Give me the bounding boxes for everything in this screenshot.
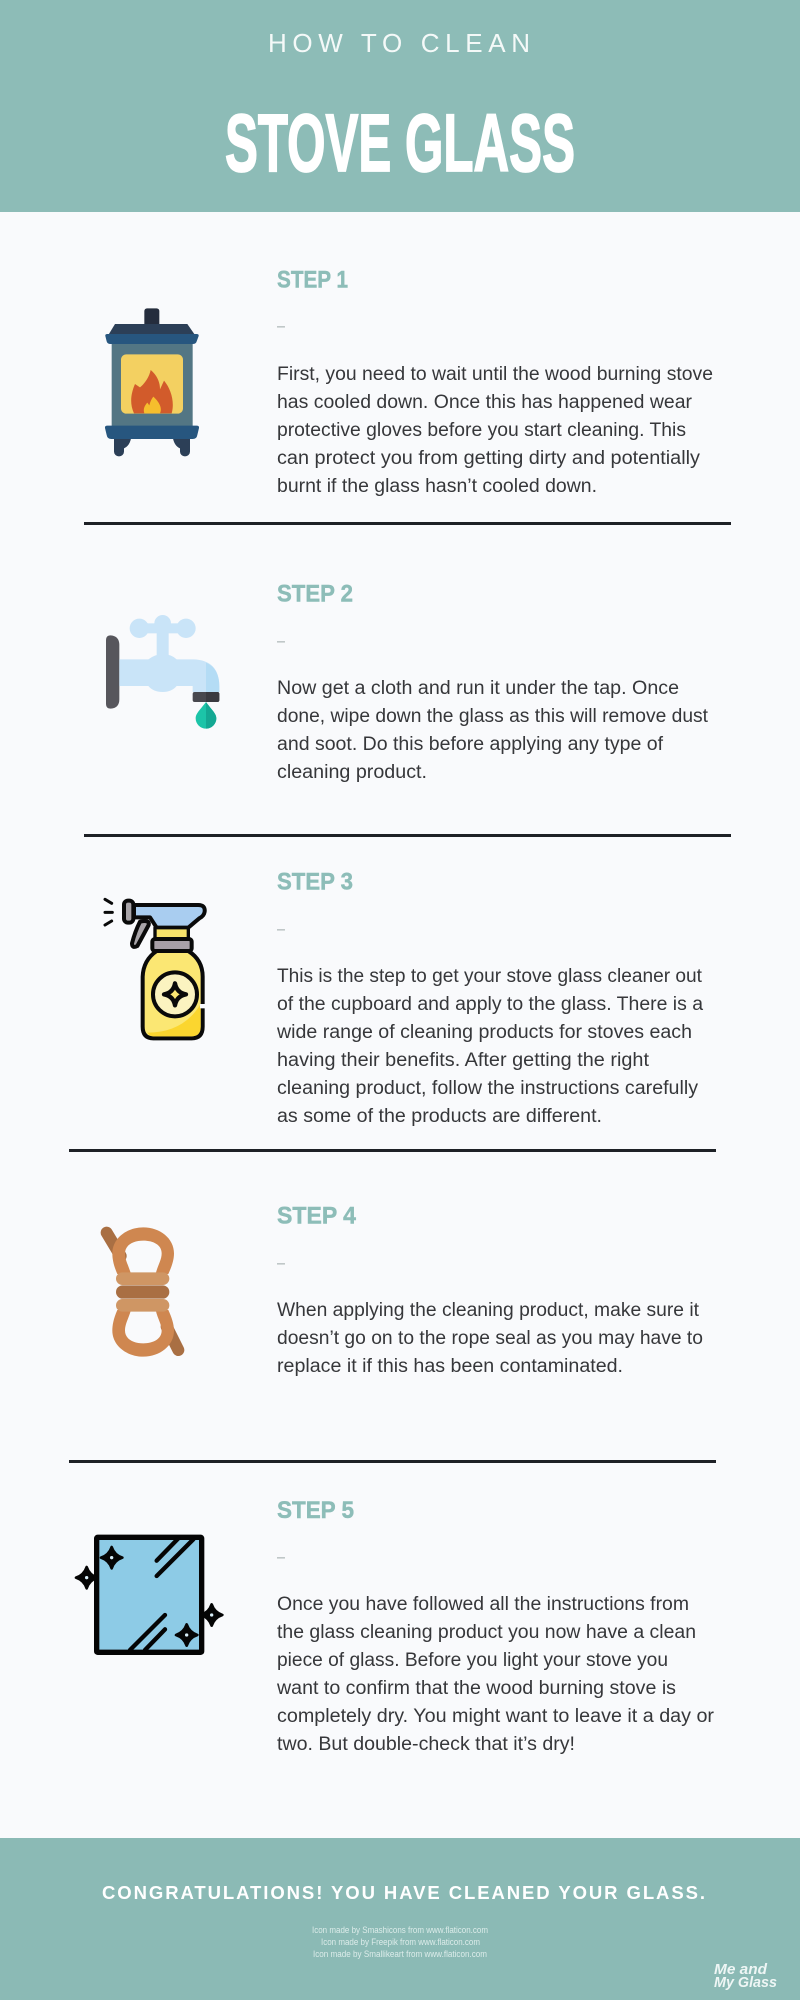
text block: step 5: Once you have followed all the instructions from	[277, 1594, 689, 1615]
text block: step 2: cleaning product.	[277, 762, 427, 783]
dash: –	[277, 1547, 285, 1568]
text block: step 3: This is the step to get your stove glass cleaner out	[277, 966, 703, 987]
icon: clean glass pane	[76, 1537, 222, 1652]
panel: footer	[0, 1838, 800, 2000]
panel: step 3	[105, 868, 703, 1127]
icon credits: Icon made by Smashicons from www.flaticon.com	[312, 1925, 488, 1935]
icon: spray bottle	[105, 899, 205, 1038]
icon credits: Icon made by Freepik from www.flaticon.com	[321, 1937, 480, 1947]
text block: step 3: wide range of cleaning products for stoves each	[276, 1022, 692, 1043]
text block: step 3: cleaning product, follow the instructions carefully	[277, 1078, 699, 1099]
text block: step 3	[276, 966, 703, 1127]
text block: step 1: has cooled down. Once this has happened wear	[277, 392, 693, 413]
logo: me and my glass: My Glass	[714, 1975, 777, 1991]
text block: step 4: replace it if this has been contaminated.	[277, 1356, 623, 1377]
text block: step 3: as some of the products are different.	[277, 1106, 602, 1127]
text block: step 5: two. But double-check that it’s dry!	[277, 1734, 575, 1755]
text block: step 5: the glass cleaning product you now have a clean	[277, 1622, 696, 1643]
title: stove glass: STOVE GLASS	[225, 98, 575, 189]
text block: step 3: having their benefits. After getting the right	[277, 1050, 650, 1071]
dash: –	[277, 316, 285, 337]
panel: step 1	[105, 266, 713, 497]
text block: step 4: When applying the cleaning product, make sure it	[277, 1300, 700, 1321]
panel: step 5	[76, 1497, 715, 1755]
icon: wood burning stove	[105, 308, 199, 456]
icon: rope	[107, 1227, 178, 1357]
dash: –	[277, 1253, 285, 1274]
logo: me and my glass: Me and	[714, 1962, 768, 1978]
icon credits: Icon made by Smallikeart from www.flaticon.com	[313, 1949, 487, 1959]
panel: header	[0, 0, 800, 212]
callout: congratulations: CONGRATULATIONS! YOU HAVE CLEANED YOUR GLASS.	[102, 1882, 705, 1903]
text block: step 2: Now get a cloth and run it under the tap. Once	[277, 678, 679, 699]
text block: step 4	[277, 1300, 703, 1377]
text block: step 1: protective gloves before you start cleaning. This	[277, 420, 686, 441]
dash: –	[277, 919, 285, 940]
text block: step 2: and soot. Do this before applying any type of	[277, 734, 664, 755]
text block: step 1: can protect you from getting dirty and potentially	[277, 448, 701, 469]
text block: step 5: want to confirm that the wood burning stove is	[276, 1678, 676, 1699]
heading: step 5: STEP 5	[277, 1497, 354, 1524]
text block: step 2: done, wipe down the glass as this will remove dust	[277, 706, 709, 727]
text block: step 3: of the cupboard and apply to the glass. There is a	[277, 994, 703, 1015]
text block: step 5	[276, 1594, 715, 1755]
dash: –	[277, 631, 285, 652]
icon: water tap	[106, 615, 219, 729]
icon credits	[312, 1925, 488, 1959]
heading: step 3: STEP 3	[277, 868, 353, 896]
title: how to clean: HOW TO CLEAN	[268, 28, 530, 58]
logo: me and my glass	[714, 1962, 777, 1991]
text block: step 5: completely dry. You might want to leave it a day or	[277, 1706, 715, 1727]
text block: step 1: First, you need to wait until the wood burning stove	[277, 364, 713, 385]
heading: step 2: STEP 2	[277, 580, 353, 608]
text block: step 4: doesn’t go on to the rope seal as you may have to	[277, 1328, 703, 1349]
text block: step 1: burnt if the glass hasn’t cooled down.	[277, 476, 597, 497]
text block: step 1	[277, 364, 713, 497]
text block: step 2	[277, 678, 709, 783]
panel: step 2	[106, 580, 709, 783]
heading: step 1: STEP 1	[277, 266, 348, 294]
heading: step 4: STEP 4	[277, 1202, 356, 1230]
panel: step 4	[107, 1202, 703, 1377]
text block: step 5: piece of glass. Before you light your stove you	[277, 1650, 668, 1671]
